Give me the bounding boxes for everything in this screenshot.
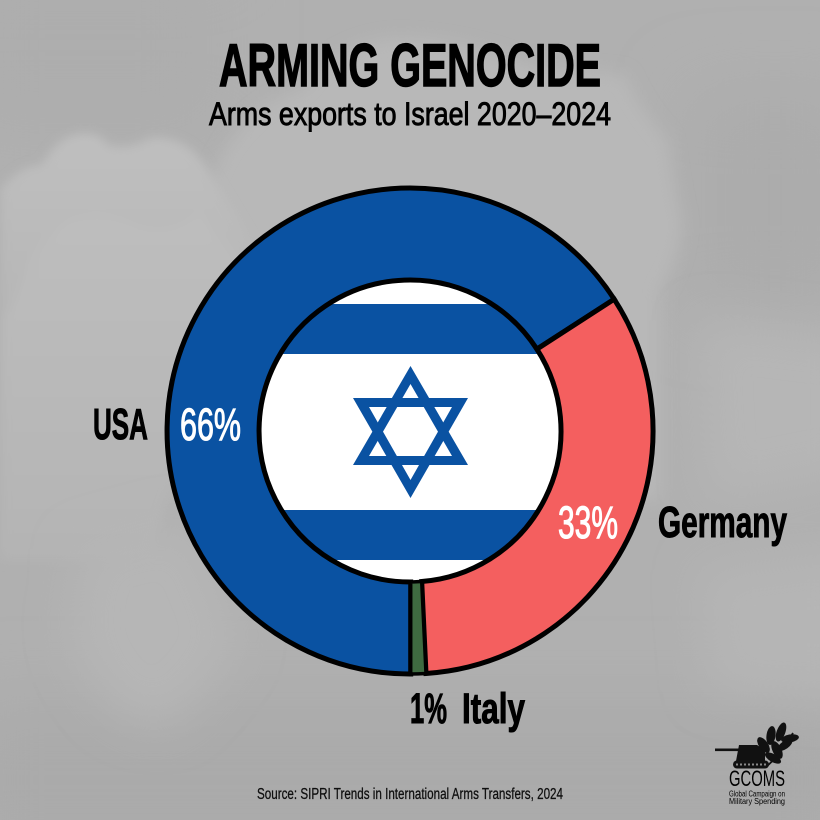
source note: Source: SIPRI Trends in International Arms Transfers, 2024 xyxy=(257,786,563,803)
label: 1% Italy xyxy=(410,685,525,733)
label: 1% Italy: Italy xyxy=(462,685,525,733)
GCOMS logo xyxy=(715,721,800,806)
label: 1% Italy: 1% xyxy=(410,685,447,733)
segment: Italy 1% xyxy=(411,582,426,674)
icon: star of David xyxy=(353,366,468,498)
logo tagline: Military Spending xyxy=(729,797,785,806)
logo wordmark: GCOMS xyxy=(729,766,785,791)
donut chart xyxy=(167,188,653,674)
label: USA: USA xyxy=(93,400,148,449)
segment: USA 66% xyxy=(167,188,614,674)
logo tagline: Global Campaign on xyxy=(729,790,785,798)
flag of Israel xyxy=(250,281,570,581)
title: ARMING GENOCIDE xyxy=(219,32,601,99)
logo tagline xyxy=(729,790,785,806)
value: 33%: 33% xyxy=(558,497,618,548)
segment: Germany 33% xyxy=(422,299,653,674)
value: 66%: 66% xyxy=(180,399,241,450)
subtitle: Arms exports to Israel 2020–2024 xyxy=(209,96,611,132)
icon: tank with olive branch xyxy=(715,721,800,768)
